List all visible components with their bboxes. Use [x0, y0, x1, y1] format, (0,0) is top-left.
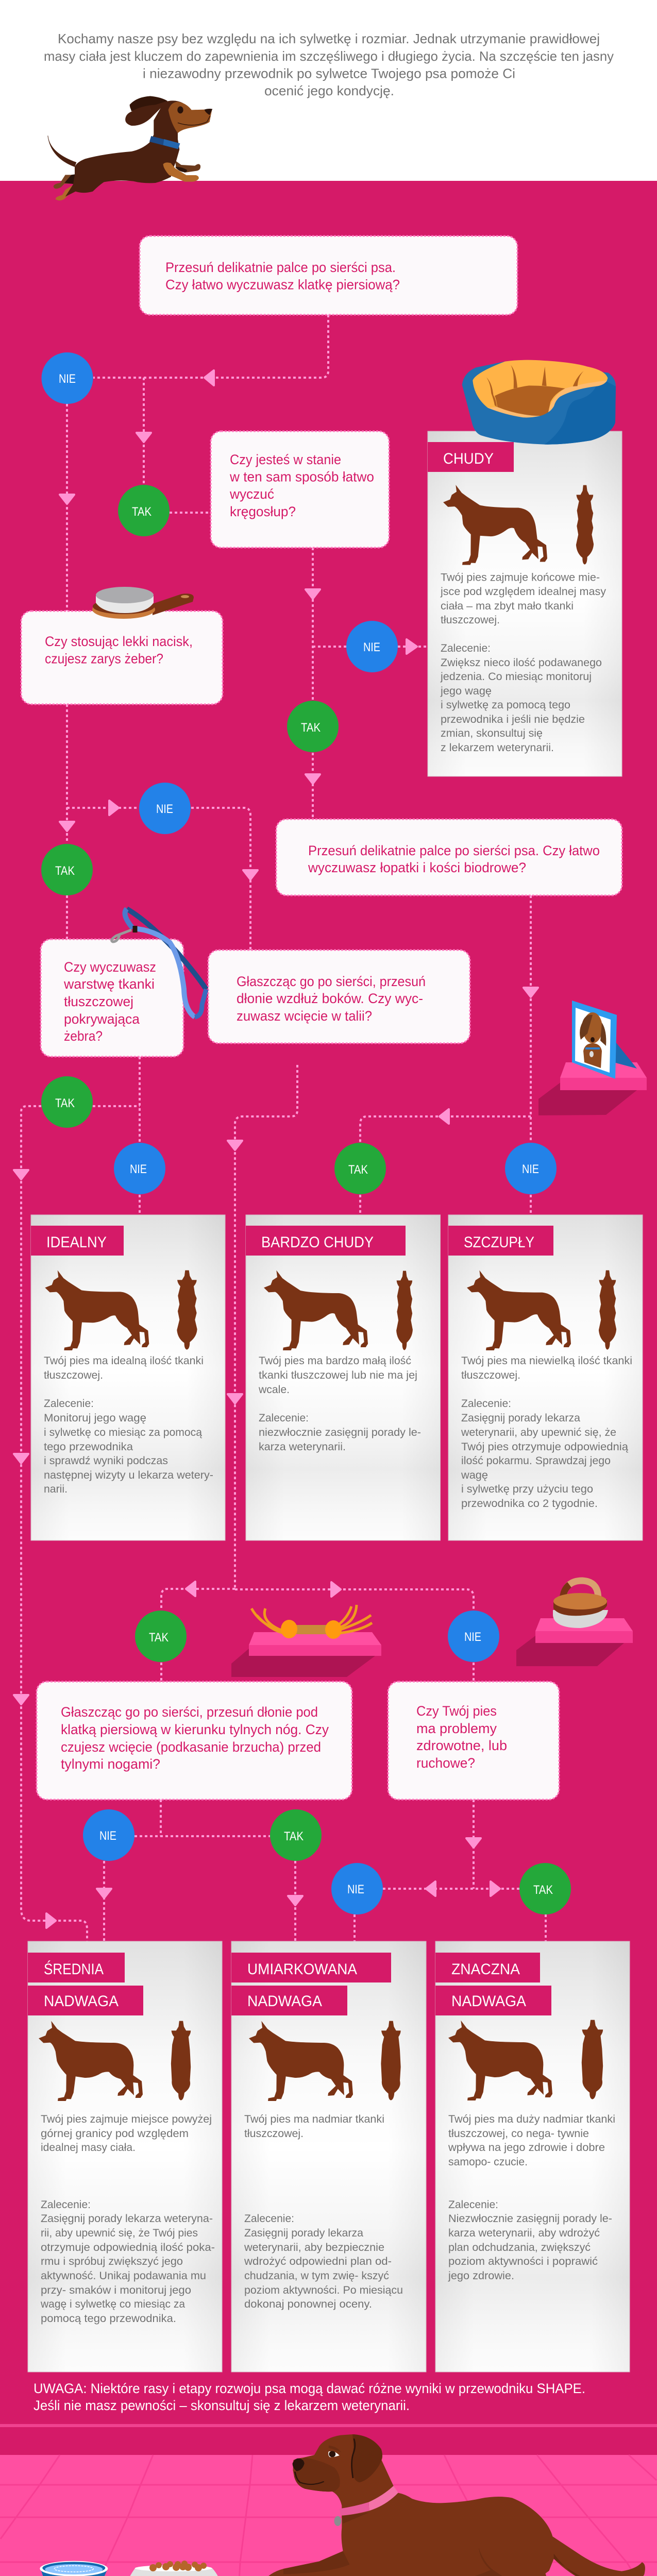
- card: BARDZO CHUDY: karza weterynarii.: [259, 1441, 346, 1453]
- question box: fat layer: warstwę tkanki: [63, 976, 155, 992]
- question box: fat layer: [41, 939, 183, 1057]
- page background: white top: [0, 0, 657, 181]
- card: CHUDY: z lekarzem weterynarii.: [441, 742, 554, 754]
- flow arrows: [14, 370, 538, 1928]
- card: ŚREDNIA NADWAGA: aktywność. Unikaj podawania mu: [41, 2270, 206, 2282]
- card: ZNACZNA NADWAGA: [435, 1941, 630, 2372]
- question box: fat layer: pokrywająca: [64, 1011, 140, 1027]
- card: IDEALNY: [31, 1215, 225, 1540]
- question box: shoulder blades: Przesuń delikatnie palce po sierści psa. Czy łatwo: [308, 843, 600, 858]
- question box: health problems: ma problemy: [416, 1721, 497, 1736]
- card: CHUDY: Zalecenie:: [441, 642, 491, 654]
- card: UMIARKOWANA NADWAGA: UMIARKOWANA: [247, 1961, 357, 1978]
- NIE decision nodes: NIE: [522, 1162, 539, 1176]
- NIE decision nodes: NIE: [130, 1162, 147, 1176]
- TAK decision nodes: TAK: [55, 864, 75, 878]
- card: BARDZO CHUDY: Zalecenie:: [259, 1412, 309, 1424]
- question box: spine: w ten sam sposób łatwo: [229, 469, 374, 484]
- card: CHUDY: ciała – ma zbyt mało tkanki: [441, 600, 574, 612]
- card: IDEALNY: tłuszczowej.: [44, 1369, 103, 1381]
- card: IDEALNY: narii.: [44, 1483, 68, 1495]
- question box: shoulder blades: wyczuwasz łopatki i kości biodrowe?: [308, 860, 526, 875]
- TAK decision nodes: TAK: [348, 1163, 368, 1177]
- icon: food bowl: [127, 2561, 221, 2576]
- question box: ribs: Czy stosując lekki nacisk,: [45, 634, 193, 649]
- question box: ribs: [21, 611, 223, 704]
- question box: spine: kręgosłup?: [230, 504, 296, 519]
- card: IDEALNY: Twój pies ma idealną ilość tkanki: [44, 1355, 204, 1367]
- card: ŚREDNIA NADWAGA: NADWAGA: [44, 1993, 119, 2010]
- intro text: [44, 31, 614, 98]
- card: IDEALNY: następnej wizyty u lekarza wetery-: [44, 1469, 213, 1481]
- question box: fat layer: żebra?: [64, 1028, 103, 1044]
- question box: health problems: [388, 1682, 559, 1800]
- card: UMIARKOWANA NADWAGA: [231, 1941, 426, 2372]
- card: ZNACZNA NADWAGA: samopo- czucie.: [448, 2156, 528, 2168]
- card: BARDZO CHUDY: BARDZO CHUDY: [261, 1234, 374, 1251]
- card: CHUDY: CHUDY: [443, 450, 494, 467]
- card: CHUDY: przewodnika i jeśli nie będzie: [441, 714, 585, 725]
- question box: health problems: Czy Twój pies: [416, 1703, 497, 1719]
- icon: rope toy on pad: [231, 1605, 381, 1677]
- question box: fat layer: tłuszczowej: [64, 994, 133, 1009]
- card: CHUDY: jedzenia. Co miesiąc monitoruj: [440, 671, 592, 683]
- question box: chest: Czy łatwo wyczuwasz klatkę piersiową?: [165, 277, 400, 293]
- card: SZCZUPŁY: Twój pies otrzymuje odpowiednią: [461, 1441, 628, 1453]
- card: UMIARKOWANA NADWAGA: Twój pies ma nadmiar tkanki: [244, 2113, 384, 2125]
- floor: [0, 2455, 657, 2576]
- card: SZCZUPŁY: Zalecenie:: [461, 1398, 511, 1410]
- question box: spine: Czy jesteś w stanie: [230, 452, 341, 467]
- question box: belly tuck: tylnymi nogami?: [61, 1756, 160, 1772]
- card: SZCZUPŁY: Zasięgnij porady lekarza: [461, 1412, 580, 1424]
- card: ZNACZNA NADWAGA: Zalecenie:: [448, 2199, 498, 2211]
- note text: [33, 2381, 585, 2413]
- question box: chest: [140, 236, 517, 315]
- icon: leash: [112, 909, 206, 1017]
- card: UMIARKOWANA NADWAGA: NADWAGA: [247, 1993, 322, 2010]
- card: UMIARKOWANA NADWAGA: weterynarii, aby bezpiecznie: [244, 2242, 384, 2253]
- card: IDEALNY: i sylwetkę co miesiąc za pomocą: [44, 1427, 202, 1438]
- card: ŚREDNIA NADWAGA: Twój pies zajmuje miejsce powyżej: [41, 2113, 212, 2125]
- icon: round brush: [92, 587, 194, 619]
- card: ŚREDNIA NADWAGA: rmu i spróbuj zwiększyć jego: [41, 2256, 183, 2267]
- TAK decision nodes: TAK: [284, 1829, 304, 1843]
- card: ŚREDNIA NADWAGA: rii, aby upewnić się, że Twój pies: [41, 2227, 198, 2239]
- NIE decision nodes: NIE: [99, 1829, 116, 1843]
- NIE decision nodes: NIE: [363, 640, 380, 654]
- question box: spine: wyczuć: [229, 486, 274, 502]
- TAK decision nodes: TAK: [149, 1631, 169, 1645]
- NIE decision nodes: [41, 352, 557, 1914]
- TAK decision nodes: TAK: [132, 505, 151, 519]
- card: UMIARKOWANA NADWAGA: chudzania, w tym zwię- kszyć: [244, 2270, 389, 2282]
- card: ŚREDNIA NADWAGA: Zasięgnij porady lekarza weteryna-: [41, 2213, 213, 2225]
- card: CHUDY: Zwiększ nieco ilość podawanego: [441, 657, 602, 669]
- intro text: Kochamy nasze psy bez względu na ich sylwetkę i rozmiar. Jednak utrzymanie prawidłowej: [58, 31, 600, 46]
- question box: belly tuck: [37, 1682, 352, 1800]
- card: ŚREDNIA NADWAGA: pomocą tego przewodnika.: [41, 2313, 176, 2325]
- question box: health problems: zdrowotne, lub: [416, 1738, 507, 1753]
- card: ŚREDNIA NADWAGA: otrzymuje odpowiednią ilość poka-: [41, 2242, 215, 2253]
- intro text: i niezawodny przewodnik po sylwetce Twojego psa pomoże Ci: [143, 66, 515, 81]
- TAK decision nodes: TAK: [55, 1096, 75, 1110]
- card: IDEALNY: tego przewodnika: [44, 1441, 133, 1453]
- card: CHUDY: jsce pod względem idealnej masy: [440, 586, 607, 598]
- card: ZNACZNA NADWAGA: wpływa na jego zdrowie i dobre: [448, 2142, 605, 2154]
- card: ZNACZNA NADWAGA: Twój pies ma duży nadmiar tkanki: [448, 2113, 615, 2125]
- card: CHUDY: i sylwetkę za pomocą tego: [441, 699, 570, 711]
- card: SZCZUPŁY: Twój pies ma niewielką ilość tkanki: [461, 1355, 632, 1367]
- card: ZNACZNA NADWAGA: tłuszczowej, co nega- tywnie: [448, 2128, 589, 2140]
- illustration: brown dog sitting: [262, 2434, 645, 2576]
- card: SZCZUPŁY: [448, 1215, 643, 1540]
- card: SZCZUPŁY: weterynarii, aby upewnić się, że: [461, 1427, 616, 1438]
- question box: fat layer: Czy wyczuwasz: [64, 959, 156, 975]
- card: ZNACZNA NADWAGA: NADWAGA: [451, 1993, 526, 2010]
- card: UMIARKOWANA NADWAGA: poziom aktywności. Po miesiącu: [244, 2284, 403, 2296]
- card: BARDZO CHUDY: niezwłocznie zasięgnij porady le-: [259, 1427, 421, 1438]
- card: BARDZO CHUDY: Twój pies ma bardzo małą ilość: [259, 1355, 411, 1367]
- card: ŚREDNIA NADWAGA: idealnej masy ciała.: [41, 2142, 136, 2154]
- question box: waist: zuwasz wcięcie w talii?: [237, 1008, 372, 1024]
- card: BARDZO CHUDY: [246, 1215, 440, 1540]
- card: SZCZUPŁY: SZCZUPŁY: [464, 1234, 534, 1251]
- note text: Jeśli nie masz pewności – skonsultuj się z lekarzem weterynarii.: [33, 2398, 410, 2413]
- card: ŚREDNIA NADWAGA: ŚREDNIA: [44, 1960, 104, 1978]
- question box: shoulder blades: [276, 819, 622, 895]
- card: ŚREDNIA NADWAGA: [28, 1941, 222, 2372]
- icon: dog bed: [462, 360, 616, 445]
- card: UMIARKOWANA NADWAGA: dokonaj ponownej oceny.: [244, 2298, 372, 2310]
- card: IDEALNY: Monitoruj jego wagę: [44, 1412, 146, 1424]
- card: CHUDY: jego wagę: [440, 685, 492, 697]
- TAK decision nodes: TAK: [533, 1883, 553, 1897]
- question box: spine: [211, 431, 389, 548]
- card: ZNACZNA NADWAGA: poziom aktywności i poprawić: [448, 2256, 598, 2267]
- card: ZNACZNA NADWAGA: Niezwłocznie zasięgnij porady le-: [448, 2213, 612, 2225]
- card: UMIARKOWANA NADWAGA: Zasięgnij porady lekarza: [244, 2227, 363, 2239]
- TAK decision nodes: [41, 485, 571, 1914]
- note text: UWAGA: Niektóre rasy i etapy rozwoju psa mogą dawać różne wyniki w przewodniku SHAPE.: [33, 2381, 585, 2396]
- intro text: masy ciała jest kluczem do zapewnienia im szczęśliwego i długiego życia. Na szczęście ten jasny: [44, 48, 614, 64]
- question box: waist: dłonie wzdłuż boków. Czy wyc-: [237, 991, 423, 1006]
- card: IDEALNY: IDEALNY: [46, 1234, 107, 1251]
- card: ŚREDNIA NADWAGA: przy- smaków i monitoruj jego: [41, 2284, 191, 2296]
- question box: ribs: czujesz zarys żeber?: [45, 651, 163, 667]
- card: CHUDY: [428, 431, 622, 776]
- question box: belly tuck: czujesz wcięcie (podkasanie brzucha) przed: [61, 1739, 321, 1755]
- card: ZNACZNA NADWAGA: jego zdrowie.: [448, 2270, 514, 2282]
- card: SZCZUPŁY: ilość pokarmu. Sprawdzaj jego: [461, 1455, 611, 1467]
- icon: hand brush on shelf: [516, 1581, 633, 1666]
- card: IDEALNY: Zalecenie:: [44, 1398, 94, 1410]
- question box: belly tuck: klatką piersiową w kierunku tylnych nóg. Czy: [61, 1722, 329, 1737]
- card: SZCZUPŁY: tłuszczowej.: [461, 1369, 520, 1381]
- icon: framed dog photo on shelf: [538, 1001, 647, 1115]
- card: ZNACZNA NADWAGA: ZNACZNA: [451, 1961, 520, 1978]
- card: IDEALNY: i sprawdź wyniki podczas: [44, 1455, 168, 1467]
- question box: chest: Przesuń delikatnie palce po sierści psa.: [165, 260, 396, 275]
- question box: waist: [208, 950, 470, 1043]
- card: CHUDY: Twój pies zajmuje końcowe mie-: [441, 572, 600, 583]
- card: CHUDY: zmian, skonsultuj się: [441, 727, 543, 739]
- card: ŚREDNIA NADWAGA: górnej granicy pod względem: [41, 2128, 189, 2140]
- card: UMIARKOWANA NADWAGA: tłuszczowej.: [244, 2128, 304, 2140]
- NIE decision nodes: NIE: [59, 372, 76, 386]
- question box: waist: Głaszcząc go po sierści, przesuń: [237, 974, 426, 989]
- question box: belly tuck: Głaszcząc go po sierści, przesuń dłonie pod: [61, 1704, 318, 1720]
- intro text: ocenić jego kondycję.: [264, 83, 394, 98]
- NIE decision nodes: NIE: [156, 802, 173, 816]
- card: ZNACZNA NADWAGA: karza weterynarii, aby wdrożyć: [448, 2227, 600, 2239]
- TAK decision nodes: TAK: [301, 721, 321, 735]
- card: UMIARKOWANA NADWAGA: Zalecenie:: [244, 2213, 294, 2225]
- flow connectors: dotted lines: [21, 315, 546, 1941]
- card: ŚREDNIA NADWAGA: Zalecenie:: [41, 2199, 91, 2211]
- card: ŚREDNIA NADWAGA: wagę i sylwetkę co miesiąc za: [40, 2298, 185, 2310]
- question box: health problems: ruchowe?: [416, 1755, 475, 1771]
- card: ZNACZNA NADWAGA: plan odchudzania, zwiększyć: [448, 2242, 591, 2253]
- NIE decision nodes: NIE: [347, 1883, 364, 1896]
- card: CHUDY: tłuszczowej.: [441, 614, 500, 626]
- icon: running dachshund: [47, 96, 212, 200]
- wall trim: [0, 2424, 657, 2427]
- card: BARDZO CHUDY: wcale.: [258, 1384, 290, 1396]
- card: SZCZUPŁY: wagę: [461, 1469, 488, 1481]
- card: UMIARKOWANA NADWAGA: wdrożyć odpowiedni plan od-: [244, 2256, 392, 2267]
- card: BARDZO CHUDY: tkanki tłuszczowej lub nie ma jej: [259, 1369, 417, 1381]
- card: SZCZUPŁY: i sylwetkę przy użyciu tego: [461, 1483, 593, 1495]
- icon: water bowl: [40, 2561, 108, 2576]
- NIE decision nodes: NIE: [464, 1630, 481, 1644]
- card: SZCZUPŁY: przewodnika co 2 tygodnie.: [461, 1498, 598, 1510]
